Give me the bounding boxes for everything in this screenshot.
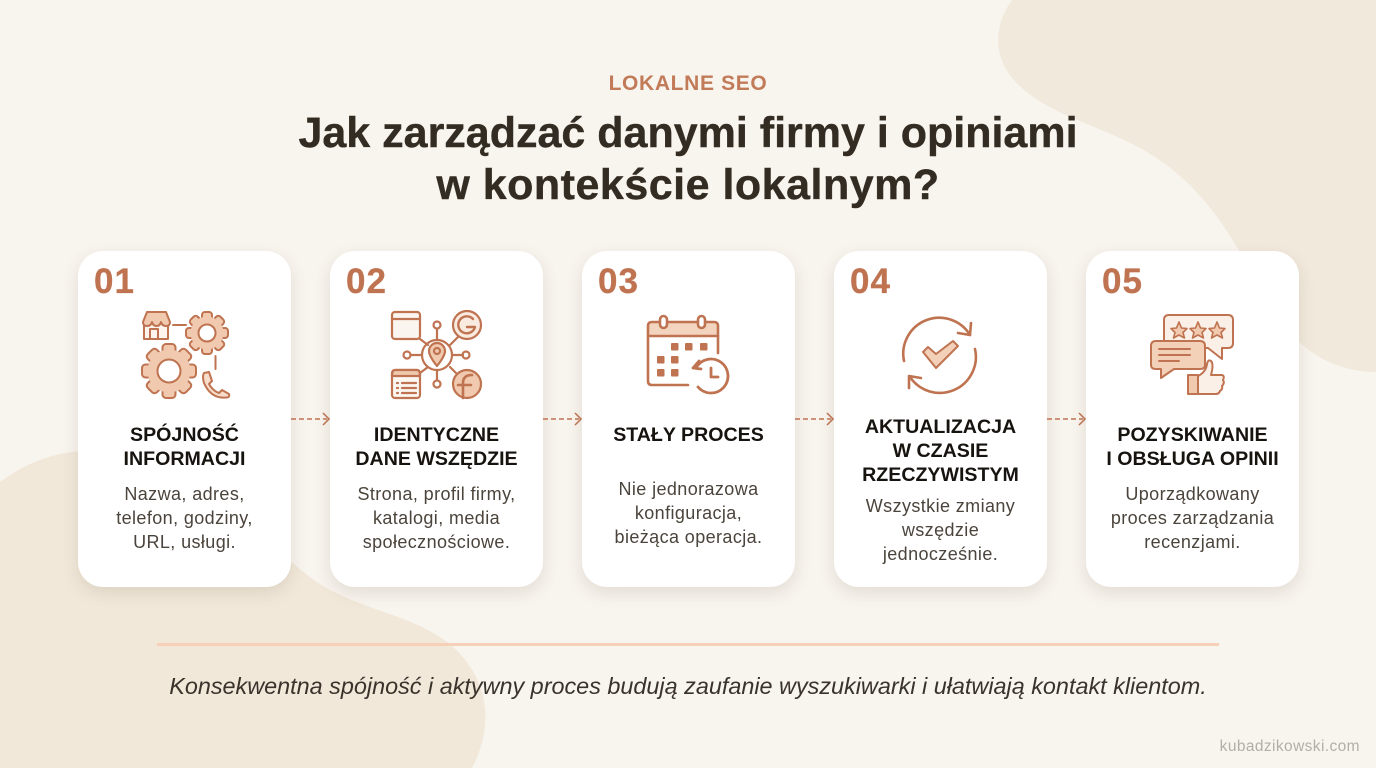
step description: bieżąca operacja.: [615, 527, 762, 547]
step heading: AKTUALIZACJA: [865, 416, 1016, 438]
icon: location hub with web and social nodes: [390, 310, 482, 400]
title: w kontekście lokalnym?: [436, 161, 940, 209]
arrow 4 to 5: [1047, 412, 1086, 426]
step heading: [124, 424, 245, 470]
step description: proces zarządzania: [1111, 508, 1274, 528]
watermark: kubadzikowski.com: [1220, 738, 1360, 755]
eyebrow label: LOKALNE SEO: [609, 72, 767, 95]
step number 05: 05: [1102, 262, 1143, 301]
step description: Nazwa, adres,: [124, 484, 245, 504]
arrow 1 to 2: [291, 412, 330, 426]
step number 04: 04: [850, 262, 891, 301]
step heading: SPÓJNOŚĆ: [130, 424, 239, 446]
step heading: [1106, 424, 1279, 470]
panel: step 5: [1086, 251, 1299, 587]
step description: społecznościowe.: [363, 532, 510, 552]
step heading: POZYSKIWANIE: [1117, 424, 1268, 446]
panel: step 2: [330, 251, 543, 587]
step heading: INFORMACJI: [124, 448, 245, 470]
step heading: W CZASIE: [893, 440, 988, 462]
panel: step 4: [834, 251, 1047, 587]
step description: Nie jednorazowa: [618, 479, 759, 499]
closing statement: Konsekwentna spójność i aktywny proces budują zaufanie wyszukiwarki i ułatwiają kontakt klientom.: [169, 673, 1207, 699]
step description: [615, 479, 762, 547]
step description: [357, 484, 516, 552]
icon: calendar with clock: [646, 314, 730, 394]
step heading: IDENTYCZNE: [374, 424, 499, 446]
step description: [866, 496, 1015, 564]
step description: konfiguracja,: [635, 503, 742, 523]
step description: wszędzie: [902, 520, 979, 540]
step description: katalogi, media: [373, 508, 500, 528]
step number 01: 01: [94, 262, 135, 301]
title: [298, 109, 1078, 209]
step description: Wszystkie zmiany: [866, 496, 1015, 516]
step description: Uporządkowany: [1125, 484, 1260, 504]
step heading: [355, 424, 518, 470]
step description: recenzjami.: [1144, 532, 1241, 552]
step description: [1111, 484, 1274, 552]
step description: URL, usługi.: [133, 532, 236, 552]
step heading: DANE WSZĘDZIE: [355, 448, 518, 470]
step number 02: 02: [346, 262, 387, 301]
step description: jednocześnie.: [883, 544, 998, 564]
icon: store, gears and phone: [141, 311, 230, 399]
panel: step 3: [582, 251, 795, 587]
divider: [157, 643, 1219, 646]
step description: [116, 484, 253, 552]
arrow 2 to 3: [543, 412, 582, 426]
panel: step 1: [78, 251, 291, 587]
step heading: STAŁY PROCES: [613, 424, 764, 446]
icon: review bubbles and thumbs up: [1150, 314, 1234, 395]
step number 03: 03: [598, 262, 639, 301]
step heading: [862, 416, 1019, 486]
step description: telefon, godziny,: [116, 508, 253, 528]
step heading: I OBSŁUGA OPINII: [1106, 448, 1279, 470]
step heading: RZECZYWISTYM: [862, 464, 1019, 486]
title: Jak zarządzać danymi firmy i opiniami: [298, 109, 1078, 157]
icon: sync arrows with check mark: [902, 316, 978, 394]
step description: Strona, profil firmy,: [357, 484, 516, 504]
arrow 3 to 4: [795, 412, 834, 426]
